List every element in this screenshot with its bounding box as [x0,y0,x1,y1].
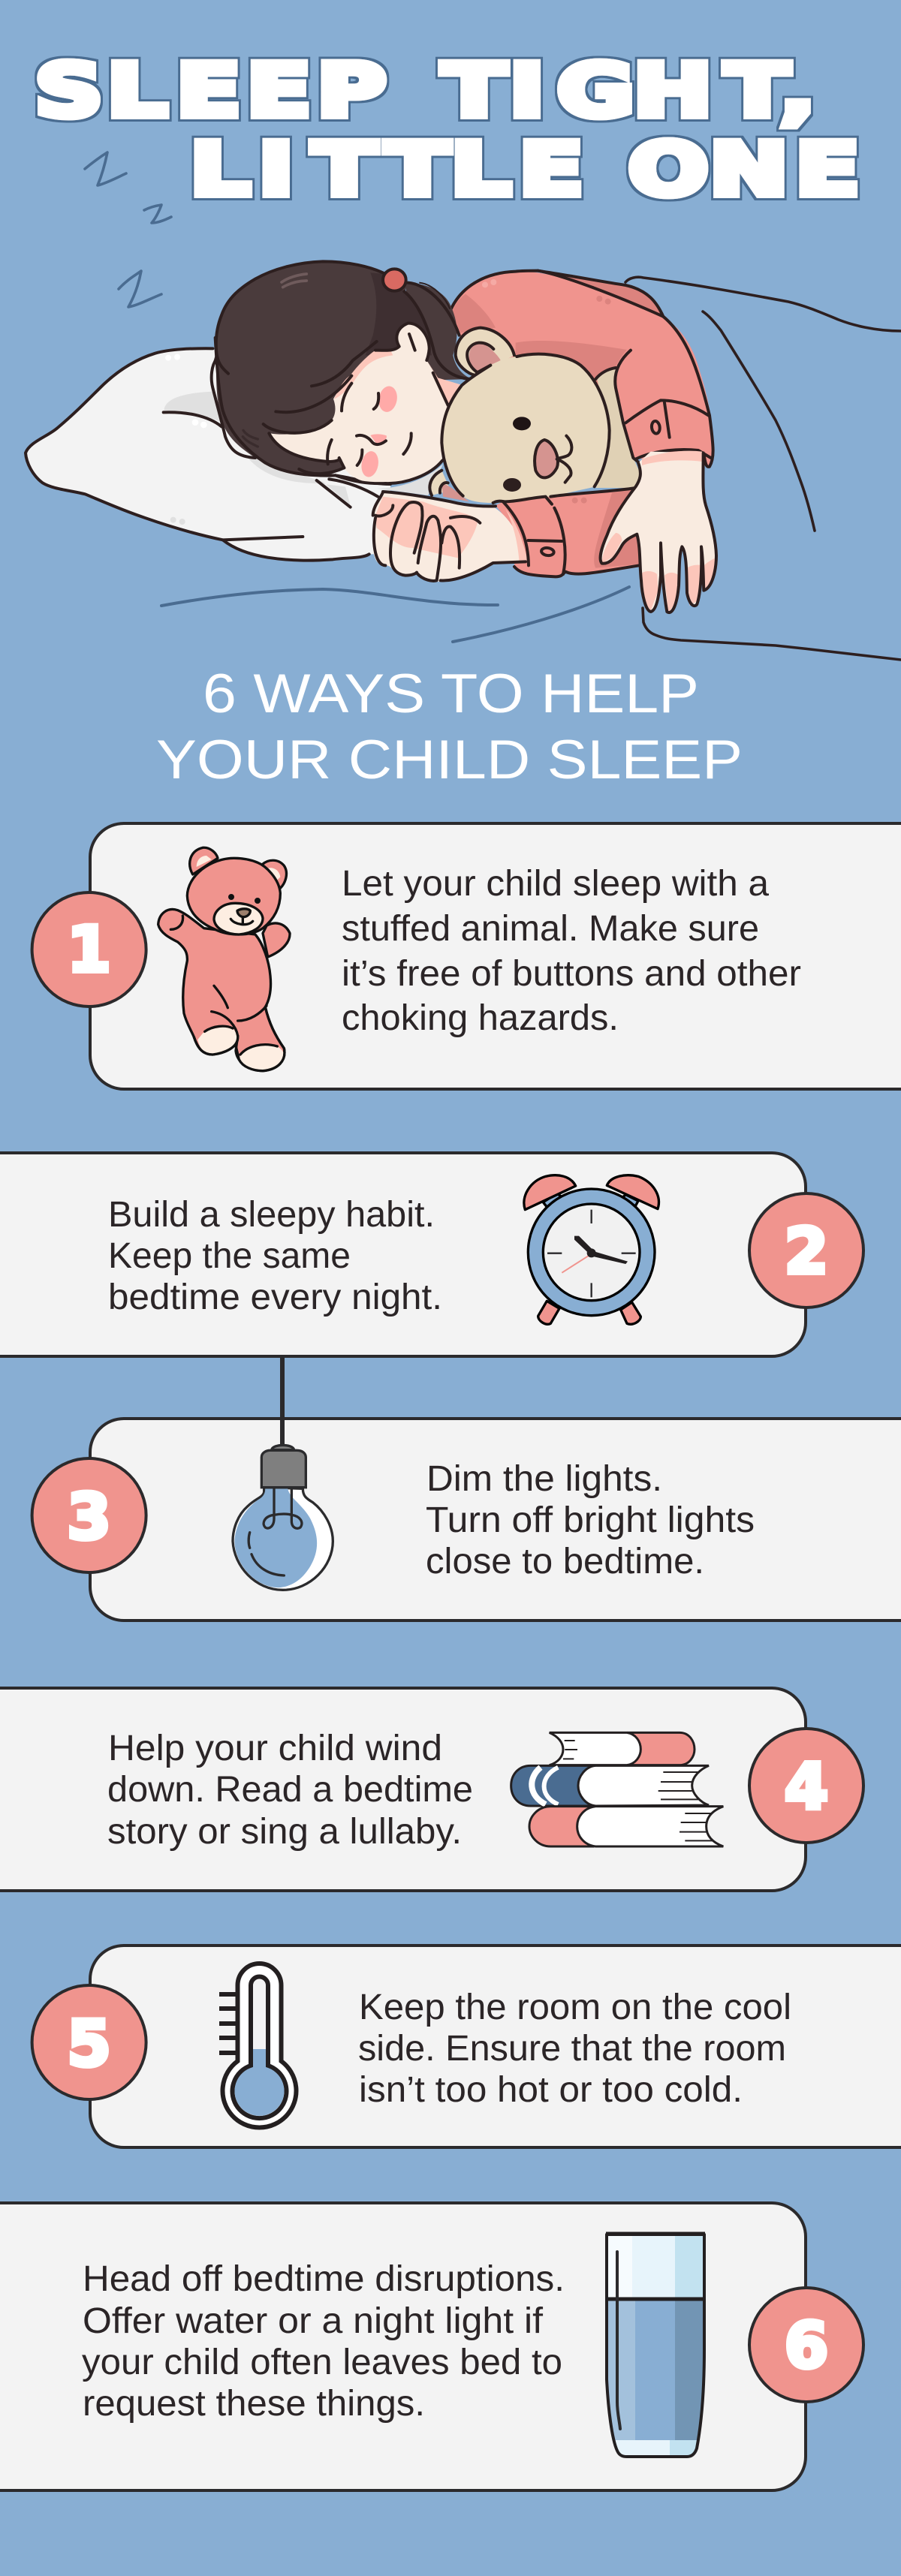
sweater back and torso [450,271,713,488]
title [35,50,860,212]
text: step 4: story or sing a lullaby. [107,1812,462,1852]
face [264,269,471,495]
icon: teddy bear [158,847,290,1071]
text: step 3 [426,1459,755,1581]
subtitle: 6 WAYS TO HELP [203,664,699,724]
card 5 [90,1946,901,2147]
hair [212,261,472,477]
icon: thermometer [219,1964,297,2127]
left hand fist [372,492,529,582]
number badge 1 [32,892,146,1007]
text: step 3: Turn off bright lights [426,1500,755,1540]
number badge 3 [32,1458,146,1572]
panel: step 5 cool room [32,1946,901,2147]
subtitle: YOUR CHILD SLEEP [156,730,743,790]
number badge 6 [749,2288,863,2402]
text: step 5: Keep the room on the cool [359,1988,791,2027]
text: step 6: Offer water or a night light if [83,2301,544,2341]
number badge 4 [749,1729,863,1843]
blue sheet lines [161,587,629,642]
text: step 2 [108,1195,442,1317]
right hand [601,451,716,613]
illustration: sleeping child hugging teddy [26,261,901,660]
teddy bear held by child [429,328,610,503]
number badge 2: 2 [785,1214,828,1288]
panel: step 4 wind down [0,1688,863,1891]
number badge 5: 5 [67,2007,111,2081]
text: step 2: Build a sleepy habit. [108,1195,435,1235]
icon: stack of books [511,1732,723,1846]
card 1 [90,823,901,1089]
text: step 6: your child often leaves bed to [82,2343,562,2382]
text: step 5 [358,1988,791,2110]
text: step 1: choking hazards. [342,998,619,1038]
subtitle [156,664,743,790]
blanket lines [625,277,901,660]
number badge 2 [749,1193,863,1308]
number badge 6: 6 [785,2309,828,2382]
card 2 [0,1153,806,1356]
text: step 1: stuffed animal. Make sure [342,909,759,949]
card 6 [0,2203,806,2490]
panel: step 1 stuffed animal [32,823,901,1089]
lower sleeve [493,488,640,576]
text: step 6: request these things. [83,2384,425,2424]
panel: step 6 bedtime disruptions [0,2203,863,2490]
card 4 [0,1688,806,1891]
hair tie [383,269,406,291]
title: LITTLE ONE [190,128,860,212]
text: step 1 [342,864,801,1038]
number badge 4: 4 [785,1750,828,1823]
number badge 5 [32,1985,146,2099]
text: step 5: side. Ensure that the room [358,2029,786,2069]
icon: hanging light bulb [233,1357,333,1590]
number badge 1: 1 [67,913,111,986]
text: step 6: Head off bedtime disruptions. [83,2259,565,2299]
text: step 6 [82,2259,565,2424]
icon: sleeping Z letters [85,152,171,307]
text: step 3: close to bedtime. [426,1542,704,1581]
card 3 [90,1419,901,1621]
text: step 2: Keep the same [108,1236,351,1276]
text: step 2: bedtime every night. [108,1277,442,1317]
title: SLEEP TIGHT, [35,50,815,133]
text: step 4 [107,1729,473,1852]
number badge 3: 3 [67,1480,111,1554]
text: step 1: Let your child sleep with a [342,864,769,904]
icon: alarm clock [524,1175,658,1324]
panel: step 3 dim the lights [32,1357,901,1621]
text: step 4: Help your child wind [108,1729,442,1768]
text: step 3: Dim the lights. [426,1459,662,1499]
text: step 4: down. Read a bedtime [107,1770,473,1810]
text: step 1: it’s free of buttons and other [342,954,801,994]
text: step 5: isn’t too hot or too cold. [359,2070,743,2110]
icon: glass of water [605,2232,706,2458]
panel: step 2 sleepy habit [0,1153,863,1356]
pillow [26,348,390,561]
